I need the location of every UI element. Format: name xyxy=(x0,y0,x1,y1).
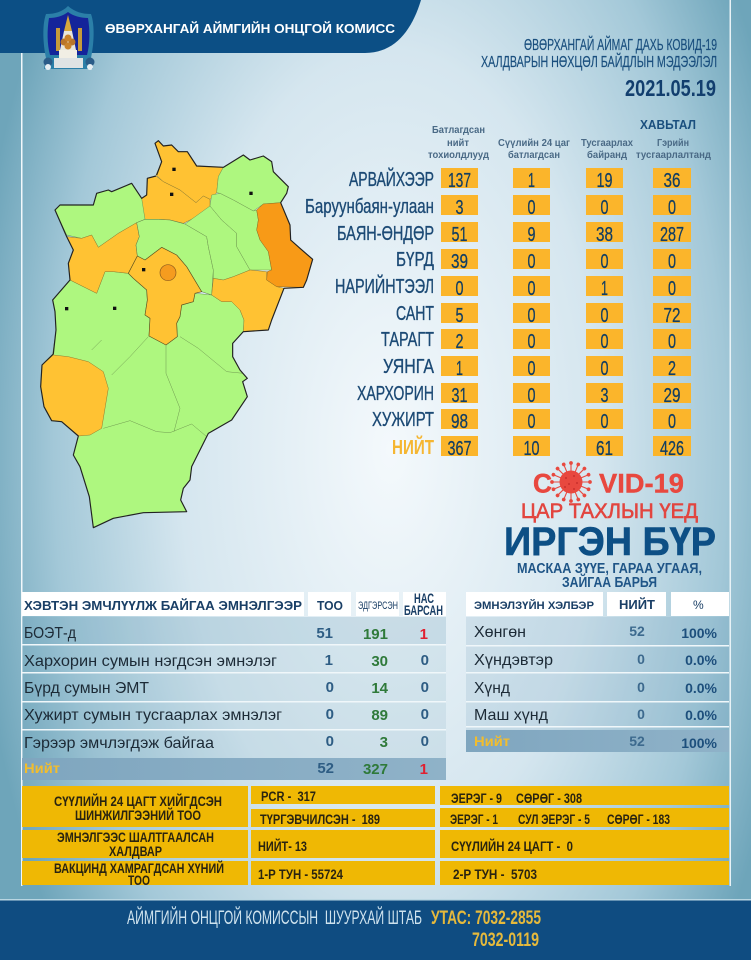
soum values: 61 xyxy=(596,438,613,460)
panel: testing and vaccination: СҮҮЛИЙН 24 ЦАГТ - 0 xyxy=(451,839,573,854)
soum values: 0 xyxy=(600,331,608,353)
panel: testing and vaccination: ТҮРГЭВЧИЛСЭН - 189 xyxy=(260,812,380,827)
table: clinical forms: Хүндэвтэр xyxy=(474,652,553,669)
panel: testing and vaccination: 1-Р ТУН - 55724 xyxy=(258,867,343,882)
covid-19 slogan: VID-19 xyxy=(599,468,684,498)
table: clinical forms: Хөнгөн xyxy=(474,624,526,641)
column headers: ХАВЬТАЛ xyxy=(640,117,696,132)
table: hospital treatment: 52 xyxy=(317,760,334,777)
table: hospital treatment: БОЭТ-д xyxy=(24,625,77,642)
date: 2021.05.19 xyxy=(625,75,716,101)
soum values: 2 xyxy=(456,331,464,353)
panel: testing and vaccination: ВАКЦИНД ХАМРАГДСАН ХҮНИЙ xyxy=(54,861,224,876)
soum values: 5 xyxy=(456,305,464,327)
soum values: 0 xyxy=(668,197,676,219)
panel: testing and vaccination xyxy=(22,786,729,888)
map of soums xyxy=(41,141,313,528)
soum names: САНТ xyxy=(396,303,434,325)
footer contact: 7032-0119 xyxy=(472,930,539,951)
table: hospital treatment: 0 xyxy=(421,706,429,723)
table: hospital treatment: ТОО xyxy=(317,598,343,613)
table: hospital treatment: 1 xyxy=(325,652,333,669)
column headers: Батлагдсан xyxy=(432,124,485,136)
panel: testing and vaccination: ЭМНЭЛГЭЭС ШАЛТГААЛСАН xyxy=(57,830,214,845)
column headers: батлагдсан xyxy=(508,149,560,161)
table: clinical forms: 100% xyxy=(681,735,718,751)
table: hospital treatment: 0 xyxy=(326,706,334,723)
heading: report title xyxy=(481,36,717,71)
soum values: 367 xyxy=(448,438,472,460)
soum values: 0 xyxy=(668,331,676,353)
soum values: 3 xyxy=(456,197,464,219)
table: clinical forms: 0.0% xyxy=(685,652,718,668)
soum values: 0 xyxy=(528,251,536,273)
soum names: НАРИЙНТЭЭЛ xyxy=(335,274,434,298)
footer band xyxy=(0,899,751,960)
covid-19 slogan: ЗАЙГАА БАРЬЯ xyxy=(562,573,657,591)
table: hospital treatment: Хархорин сумын нэгдсэн эмнэлэг xyxy=(24,653,277,670)
soum values: 0 xyxy=(600,197,608,219)
covid-19 slogan xyxy=(504,462,716,591)
panel: testing and vaccination: ЭЕРЭГ - 9 xyxy=(451,791,502,806)
soum values: 0 xyxy=(528,278,536,300)
panel: testing and vaccination: ХАЛДВАР xyxy=(109,844,162,859)
soum values: 29 xyxy=(664,385,680,407)
column headers: Тусгаарлах xyxy=(581,137,633,149)
table: hospital treatment: ХЭВТЭН ЭМЧЛҮҮЛЖ БАЙГАА ЭМНЭЛГЭЭР xyxy=(24,598,302,613)
covid-19 slogan: МАСКАА ЗҮҮЕ, ГАРАА УГААЯ, xyxy=(517,561,702,577)
soum values: 31 xyxy=(452,385,468,407)
table: clinical forms: 52 xyxy=(629,623,645,639)
table: hospital treatment xyxy=(22,590,446,780)
soum names: ТАРАГТ xyxy=(381,329,434,351)
soum values: 3 xyxy=(600,385,608,407)
soum values: 0 xyxy=(668,278,676,300)
table: clinical forms: Нийт xyxy=(474,733,510,749)
soum values: 1 xyxy=(528,170,535,192)
soum names: ХУЖИРТ xyxy=(372,409,434,431)
soum values: 1 xyxy=(456,358,463,380)
table: clinical forms: НИЙТ xyxy=(619,597,655,612)
panel: testing and vaccination: ШИНЖИЛГЭЭНИЙ ТОО xyxy=(75,808,201,823)
soum values xyxy=(448,170,684,460)
table: hospital treatment: 0 xyxy=(421,733,429,750)
soum values: 0 xyxy=(600,251,608,273)
soum values: 38 xyxy=(596,224,613,246)
soum values: 2 xyxy=(668,358,676,380)
table: hospital treatment: БАРСАН xyxy=(404,602,443,618)
table: clinical forms: Хүнд xyxy=(474,680,511,697)
soum names xyxy=(305,167,435,459)
soum names: БАЯН-ӨНДӨР xyxy=(337,223,434,245)
table: clinical forms: Маш хүнд xyxy=(474,707,549,724)
table: hospital treatment: 1 xyxy=(420,761,428,778)
panel: testing and vaccination: НИЙТ- 13 xyxy=(258,839,307,854)
soum values: 39 xyxy=(451,251,468,273)
table: hospital treatment: 3 xyxy=(380,734,388,751)
icon: emblem xyxy=(43,6,94,70)
covid-19 slogan: ИРГЭН БҮР xyxy=(504,520,716,564)
header band xyxy=(0,0,421,53)
soum values: 0 xyxy=(528,358,536,380)
table: clinical forms: 0.0% xyxy=(685,707,718,723)
table: hospital treatment: 327 xyxy=(363,761,388,778)
table: hospital treatment: 0 xyxy=(326,679,334,696)
table: hospital treatment: 14 xyxy=(371,680,389,697)
soum names: НИЙТ xyxy=(392,435,434,459)
table: clinical forms xyxy=(466,592,729,752)
column headers: тохиолдлууд xyxy=(428,149,489,161)
table: clinical forms: % xyxy=(693,598,704,612)
soum data table xyxy=(305,167,691,460)
covid-19 slogan: ЦАР ТАХЛЫН ҮЕД xyxy=(521,500,698,523)
table: hospital treatment: НАС xyxy=(414,590,434,606)
table: hospital treatment: 51 xyxy=(316,625,333,642)
table: clinical forms: 52 xyxy=(629,733,645,749)
soum values: 0 xyxy=(528,411,536,433)
panel: testing and vaccination: PCR - 317 xyxy=(261,789,316,804)
column headers xyxy=(428,117,711,161)
column headers: нийт xyxy=(447,137,469,149)
soum values: 0 xyxy=(528,331,536,353)
footer contact: УТАС: 7032-2855 xyxy=(431,908,541,929)
soum names: УЯНГА xyxy=(383,356,435,378)
table: hospital treatment: 89 xyxy=(371,707,388,724)
soum values: 10 xyxy=(524,438,540,460)
table: hospital treatment: 191 xyxy=(363,626,388,643)
panel: testing and vaccination: СӨРӨГ - 308 xyxy=(516,791,582,806)
table: clinical forms: ЭМНЭЛЗҮЙН ХЭЛБЭР xyxy=(474,599,594,612)
soum values: 0 xyxy=(528,385,536,407)
soum values: 0 xyxy=(600,358,608,380)
header title: ӨВӨРХАНГАЙ АЙМГИЙН ОНЦГОЙ КОМИСС xyxy=(105,21,395,36)
covid-19 slogan: C xyxy=(533,468,552,498)
soum names: Баруунбаян-улаан xyxy=(305,196,434,218)
table: clinical forms: 0 xyxy=(637,679,645,695)
column headers: тусгаарлалтанд xyxy=(636,149,711,161)
table: clinical forms: 0.0% xyxy=(685,680,718,696)
soum values: 426 xyxy=(660,438,684,460)
panel: testing and vaccination: СУЛ ЭЕРЭГ - 5 xyxy=(518,812,590,827)
table: hospital treatment: 0 xyxy=(421,652,429,669)
table: hospital treatment: Бүрд сумын ЭМТ xyxy=(24,680,149,697)
soum values: 9 xyxy=(528,224,536,246)
table: hospital treatment: 30 xyxy=(371,653,388,670)
column headers: байранд xyxy=(587,149,627,161)
table: hospital treatment: 0 xyxy=(421,679,429,696)
soum values: 0 xyxy=(528,305,536,327)
table: hospital treatment: 1 xyxy=(420,626,428,643)
soum values: 98 xyxy=(451,411,468,433)
footer contact: АЙМГИЙН ОНЦГОЙ КОМИССЫН ШУУРХАЙ ШТАБ xyxy=(127,907,422,929)
icon: virus xyxy=(551,462,591,502)
soum values: 0 xyxy=(600,305,608,327)
soum values: 287 xyxy=(660,224,684,246)
table: hospital treatment: Нийт xyxy=(24,760,60,776)
soum values: 0 xyxy=(528,197,536,219)
table: hospital treatment: Гэрээр эмчлэгдэж байгаа xyxy=(24,735,214,752)
soum values: 72 xyxy=(664,305,680,327)
soum values: 51 xyxy=(452,224,468,246)
table: hospital treatment: ЭДГЭРСЭН xyxy=(358,600,398,612)
soum values: 0 xyxy=(600,411,608,433)
panel: testing and vaccination: ТОО xyxy=(128,873,150,888)
panel: testing and vaccination: ЭЕРЭГ - 1 xyxy=(450,812,498,827)
soum values: 0 xyxy=(668,411,676,433)
table: hospital treatment: 0 xyxy=(326,733,334,750)
soum names: ХАРХОРИН xyxy=(357,383,434,405)
soum values: 0 xyxy=(668,251,676,273)
panel: testing and vaccination: 2-Р ТУН - 5703 xyxy=(453,867,537,882)
column headers: Сүүлийн 24 цаг xyxy=(498,137,571,149)
soum values: 36 xyxy=(664,170,680,192)
footer contact xyxy=(127,907,541,951)
soum values: 1 xyxy=(601,278,608,300)
column headers: Гэрийн xyxy=(657,137,689,149)
table: clinical forms: 100% xyxy=(681,625,718,641)
soum names: АРВАЙХЭЭР xyxy=(349,167,434,191)
soum values: 0 xyxy=(456,278,464,300)
soum values: 137 xyxy=(448,170,471,192)
table: clinical forms: 0 xyxy=(637,706,645,722)
table: clinical forms: 0 xyxy=(637,651,645,667)
soum names: БҮРД xyxy=(396,249,434,271)
table: hospital treatment: Хужирт сумын тусгаарлах эмнэлэг xyxy=(24,707,282,724)
panel: testing and vaccination: СҮҮЛИЙН 24 ЦАГТ ХИЙГДСЭН xyxy=(54,794,222,809)
panel: testing and vaccination: СӨРӨГ - 183 xyxy=(607,812,670,827)
soum values: 19 xyxy=(596,170,612,192)
